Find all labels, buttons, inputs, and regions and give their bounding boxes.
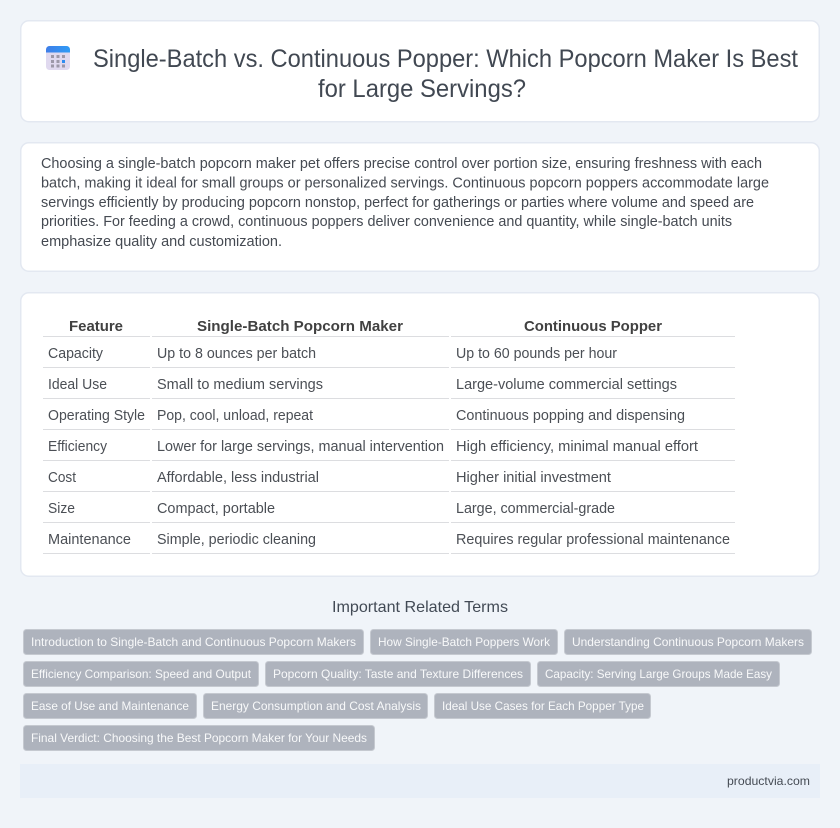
table header [69, 318, 662, 335]
tag: How Single-Batch Poppers Work [378, 635, 551, 649]
text block: introduction [41, 156, 769, 250]
table row: cost: Affordable, less industrial [157, 470, 319, 486]
table row: cost: Cost [48, 470, 76, 486]
table row: size: Large, commercial-grade [456, 501, 615, 517]
tag [24, 662, 258, 686]
tag [24, 694, 196, 718]
table row: maintenance: Maintenance [48, 532, 131, 548]
table row: maintenance: Simple, periodic cleaning [157, 532, 316, 548]
table row: maintenance: Requires regular professional maintenance [456, 532, 730, 548]
table row: operating style: Continuous popping and dispensing [456, 408, 685, 424]
footer [20, 764, 820, 798]
text block: introduction: servings efficiently by producing popcorn nonstop, perfect for gatherings or parties where volume and speed are [41, 195, 754, 211]
table row: efficiency [48, 439, 698, 455]
icon: calendar [46, 46, 70, 70]
table row: size: Size [48, 501, 75, 517]
text block: introduction: emphasize quality and customization. [41, 234, 282, 250]
panel: comparison table [21, 293, 819, 576]
table row: ideal use: Large-volume commercial settings [456, 377, 677, 393]
tags: related terms [24, 630, 812, 750]
tag [24, 726, 374, 750]
panel: header [21, 21, 819, 122]
table row: operating style [48, 408, 685, 424]
table header: Single-Batch Popcorn Maker [197, 318, 403, 335]
table row: capacity: Capacity [48, 346, 104, 362]
tag: Final Verdict: Choosing the Best Popcorn Maker for Your Needs [31, 731, 367, 745]
table row: cost: Higher initial investment [456, 470, 611, 486]
table row: capacity: Up to 60 pounds per hour [456, 346, 617, 362]
tag: Energy Consumption and Cost Analysis [211, 699, 421, 713]
table row: ideal use [48, 377, 677, 393]
tag: Ease of Use and Maintenance [31, 699, 189, 713]
table row: efficiency: High efficiency, minimal manual effort [456, 439, 698, 455]
heading: important related terms: Important Related Terms [332, 599, 508, 616]
tag: Popcorn Quality: Taste and Texture Differences [273, 667, 523, 681]
text block: introduction: priorities. For feeding a crowd, continuous poppers deliver convenience and quantity, while single-batch units [41, 214, 732, 230]
table row: ideal use: Small to medium servings [157, 377, 323, 393]
table row: efficiency: Efficiency [48, 439, 108, 455]
tag [370, 630, 558, 654]
text block: introduction: Choosing a single-batch popcorn maker pet offers precise control over portion size, ensuring freshness with each [41, 156, 762, 172]
panel: introduction [21, 143, 819, 271]
table row: ideal use: Ideal Use [48, 377, 107, 393]
table row: size: Compact, portable [157, 501, 275, 517]
tag: Understanding Continuous Popcorn Makers [572, 635, 804, 649]
tag [204, 694, 428, 718]
tag: Introduction to Single-Batch and Continuous Popcorn Makers [31, 635, 356, 649]
tag [538, 662, 780, 686]
tag [24, 630, 364, 654]
table row: cost [48, 470, 611, 486]
table row: maintenance [48, 532, 730, 548]
table header: Continuous Popper [524, 318, 662, 335]
title [93, 45, 798, 103]
tag: Efficiency Comparison: Speed and Output [31, 667, 252, 681]
table header: Feature [69, 318, 123, 335]
text block: introduction: batch, making it ideal for small groups or personalized servings. Continuous popcorn poppers accommodate large [41, 176, 769, 192]
footer text: productvia.com [727, 774, 810, 788]
table row: operating style: Pop, cool, unload, repeat [157, 408, 313, 424]
table row: capacity: Up to 8 ounces per batch [157, 346, 316, 362]
table row: size [48, 501, 615, 517]
tag: Capacity: Serving Large Groups Made Easy [545, 667, 772, 681]
title: Single-Batch vs. Continuous Popper: Which Popcorn Maker Is Best [93, 45, 798, 73]
tag [434, 694, 650, 718]
title: for Large Servings? [318, 75, 526, 103]
tag [564, 630, 812, 654]
table row: operating style: Operating Style [48, 408, 145, 424]
table row: capacity [48, 346, 617, 362]
tag: Ideal Use Cases for Each Popper Type [442, 699, 644, 713]
tag [266, 662, 530, 686]
table row: efficiency: Lower for large servings, manual intervention [157, 439, 444, 455]
